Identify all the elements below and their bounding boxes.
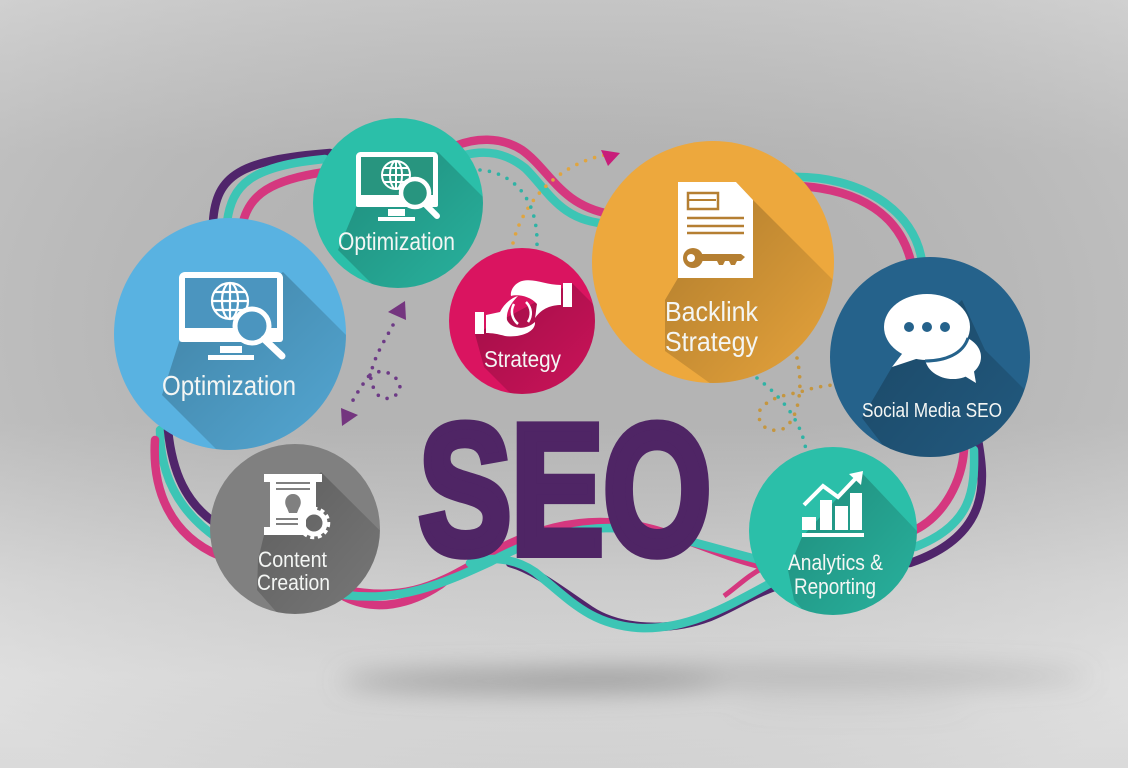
- label: Content: [258, 547, 327, 572]
- icon: chat bubbles: [884, 294, 981, 383]
- arrowhead: purple up: [388, 301, 406, 320]
- label: Optimization: [338, 228, 455, 256]
- dotted path: purple: [341, 301, 406, 426]
- icon: monitor with magnifier: [356, 154, 438, 221]
- title: SEO: [419, 386, 711, 592]
- label: Reporting: [794, 574, 876, 599]
- arrowhead: magenta: [601, 150, 620, 166]
- label: Optimization: [162, 370, 296, 401]
- panel: backlink strategy: [592, 141, 834, 383]
- label: [257, 547, 330, 595]
- panel: optimization large: [114, 218, 346, 450]
- label: Analytics &: [788, 550, 883, 575]
- label: Strategy: [665, 326, 758, 357]
- label: Backlink: [665, 296, 759, 327]
- dotted path: orange and teal: [480, 150, 620, 245]
- arrowhead: purple down: [341, 408, 358, 426]
- panel: social media seo: [830, 257, 1030, 457]
- icon: bar chart with arrow: [802, 471, 864, 537]
- floor shadow: [340, 666, 1090, 708]
- panel: strategy: [449, 248, 595, 394]
- label: Strategy: [484, 346, 561, 372]
- icon: scroll with bulb and gear: [264, 474, 328, 538]
- panel: analytics and reporting: [749, 447, 917, 615]
- label: Creation: [257, 570, 330, 595]
- icon: monitor with magnifier: [179, 275, 283, 360]
- panel: content creation: [210, 444, 380, 614]
- label: [665, 296, 759, 357]
- label: [788, 550, 883, 599]
- dotted path: right cluster: [757, 358, 833, 450]
- label: Social Media SEO: [862, 400, 1002, 422]
- panel: optimization small: [313, 118, 483, 288]
- icon: document with key: [678, 182, 753, 278]
- connecting wires: [155, 140, 982, 628]
- icon: handshake: [475, 280, 572, 336]
